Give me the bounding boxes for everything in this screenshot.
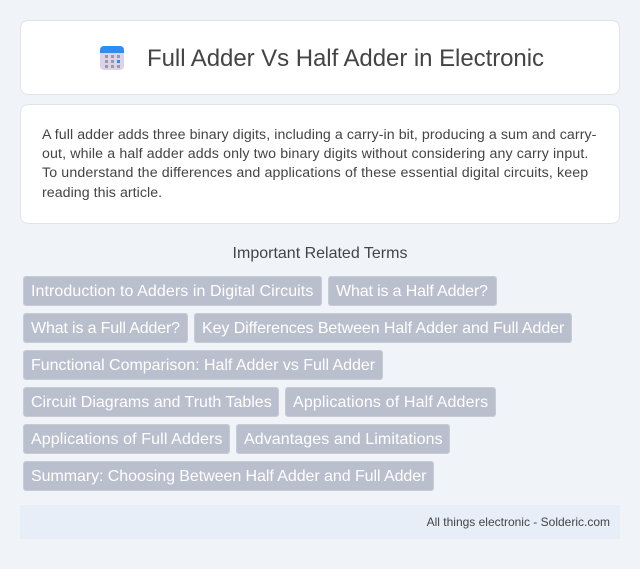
tag: Applications of Half Adders: [293, 394, 488, 411]
tag: What is a Full Adder?: [31, 320, 180, 337]
tag: What is a Half Adder?: [336, 283, 488, 300]
tag: [23, 313, 188, 343]
footer bar: [20, 505, 620, 539]
tag: Introduction to Adders in Digital Circuits: [31, 283, 313, 300]
tag: [285, 387, 496, 417]
intro paragraph: A full adder adds three binary digits, including a carry-in bit, producing a sum and carry-: [42, 127, 596, 143]
title: Full Adder Vs Half Adder in Electronic: [147, 45, 544, 72]
tag: Applications of Full Adders: [31, 431, 223, 448]
tag: [328, 276, 497, 306]
tag: Summary: Choosing Between Half Adder and Full Adder: [31, 468, 426, 485]
tag: [23, 387, 279, 417]
tag: [23, 276, 322, 306]
tag: [23, 424, 230, 454]
tag list: [23, 276, 572, 491]
intro paragraph: out, while a half adder adds only two binary digits without considering any carry input.: [42, 146, 588, 162]
intro paragraph: reading this article.: [42, 185, 162, 201]
tag: Key Differences Between Half Adder and Full Adder: [202, 320, 564, 337]
footer credit: All things electronic - Solderic.com: [427, 515, 610, 529]
header panel: [20, 20, 620, 95]
tag: Circuit Diagrams and Truth Tables: [31, 394, 272, 411]
icon: calendar: [100, 46, 124, 70]
intro paragraph: [42, 127, 596, 201]
intro paragraph: To understand the differences and applications of these essential digital circuits, keep: [42, 165, 588, 181]
section heading: Important Related Terms: [233, 245, 407, 262]
tag: Advantages and Limitations: [244, 431, 443, 448]
intro text panel: [20, 104, 620, 224]
tag: [194, 313, 572, 343]
tag: [23, 461, 434, 491]
tag: [23, 350, 383, 380]
tag: [236, 424, 450, 454]
tag: Functional Comparison: Half Adder vs Full Adder: [31, 357, 375, 374]
